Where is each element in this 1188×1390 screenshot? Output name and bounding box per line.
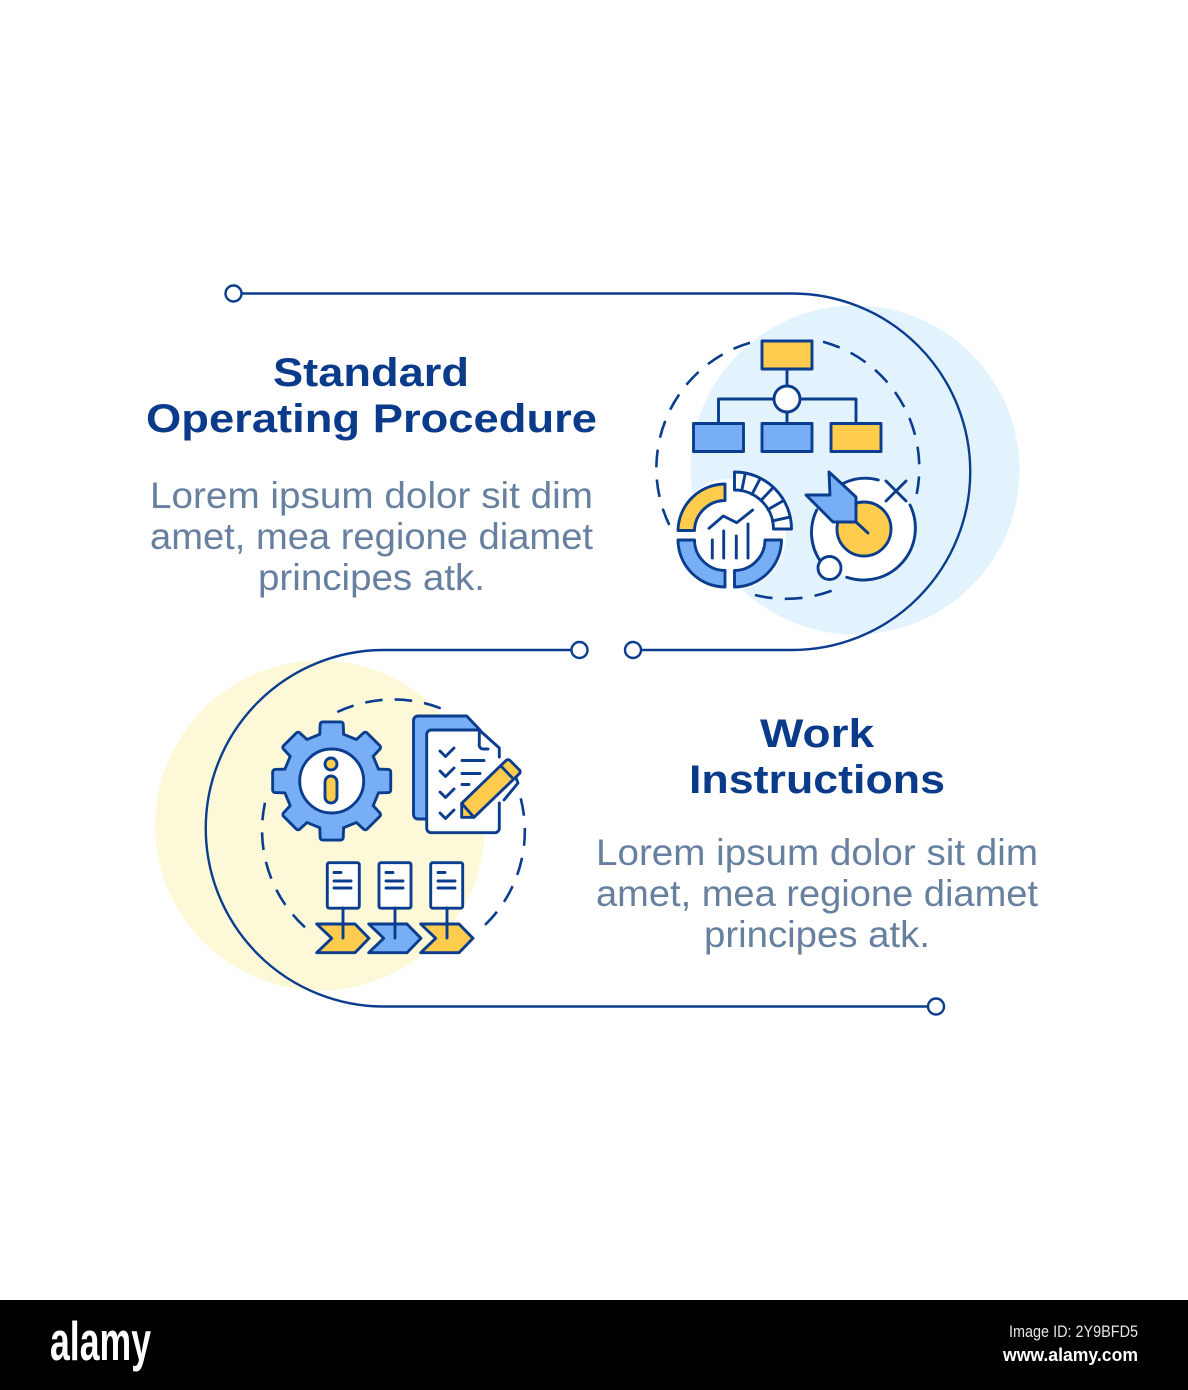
text block: standard operating procedure description (150, 475, 594, 598)
image id: Image ID: 2Y9BFD5 (1009, 1322, 1138, 1341)
heading: Work Instructions: Instructions (689, 758, 945, 802)
text block: work instructions description: Lorem ipsum dolor sit dim (596, 832, 1038, 873)
text block: standard operating procedure description: Lorem ipsum dolor sit dim (150, 475, 593, 516)
background circle: blue (690, 306, 1020, 634)
heading: Work Instructions (689, 712, 945, 802)
icon: dashboard gauge with chart (674, 472, 792, 591)
text block: standard operating procedure description: amet, mea regione diamet (150, 516, 594, 557)
icon: checklist document with pencil (414, 716, 520, 833)
icon: process flow with documents (317, 863, 473, 953)
heading: Standard Operating Procedure: Operating Procedure (146, 397, 597, 441)
text block: standard operating procedure description: principes atk. (258, 557, 485, 598)
heading: Standard Operating Procedure (146, 351, 597, 441)
connector line: bottom (206, 642, 944, 1014)
icon: target with arrow (806, 472, 915, 580)
background circle: yellow (155, 660, 485, 990)
connector line: top (226, 286, 970, 658)
logo: alamy: alamy (50, 1310, 151, 1372)
text block: work instructions description: principes atk. (704, 914, 930, 955)
icon: organisation chart (694, 341, 881, 452)
dashed ring: top icon group (656, 342, 919, 599)
text block: work instructions description: amet, mea regione diamet (596, 873, 1039, 914)
footer bar (0, 1300, 1188, 1390)
icon: gear with information symbol (275, 724, 388, 838)
heading: Standard Operating Procedure: Standard (273, 351, 469, 395)
dashed ring: bottom icon group (262, 699, 525, 927)
text block: work instructions description (596, 832, 1039, 955)
website: www.alamy.com (1002, 1345, 1138, 1365)
heading: Work Instructions: Work (760, 712, 875, 756)
